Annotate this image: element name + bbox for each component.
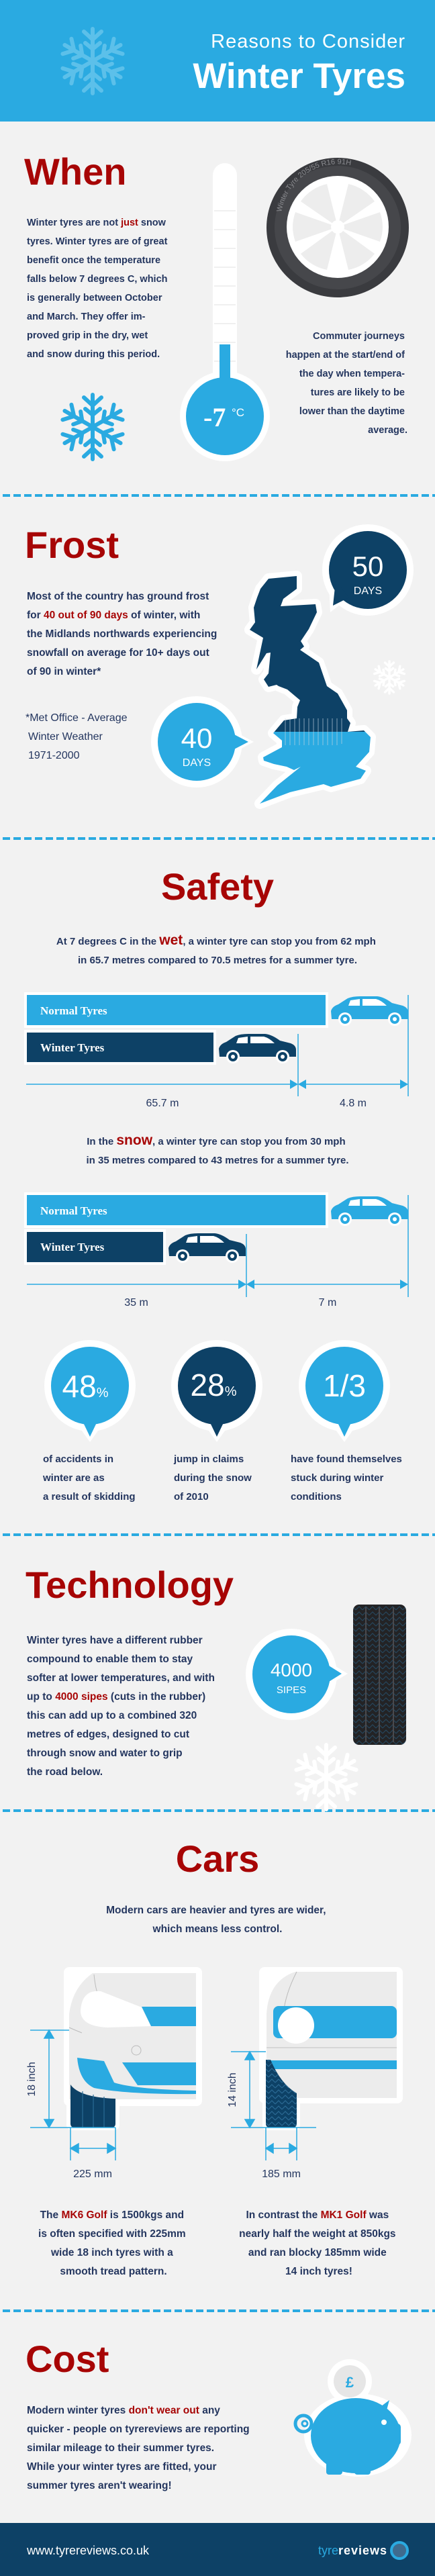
text block: commuter: average. <box>368 425 407 436</box>
icon: tyre tread <box>353 1605 406 1745</box>
text block: cost body: quicker - people on tyrereviews are reporting <box>27 2424 250 2435</box>
illustration: MK6 golf front <box>64 1967 202 2130</box>
text block: commuter: lower than the daytime <box>299 406 405 417</box>
icon: white snowflake <box>294 1745 358 1809</box>
dimension: 14 inch: 14 inch <box>227 2072 238 2107</box>
text block: commuter: the day when tempera- <box>299 369 405 379</box>
title: Winter Tyres <box>193 56 405 96</box>
text block: technology body: through snow and water to grip <box>27 1748 183 1759</box>
callout: 48% <box>44 1340 136 1442</box>
callout: 4000 sipes: SIPES <box>277 1684 306 1696</box>
text block: cost body: While your winter tyres are fitted, your <box>27 2461 217 2473</box>
panel: frost <box>25 524 414 804</box>
text block: wet intro: in 65.7 metres compared to 70.5 metres for a summer tyre. <box>78 955 357 966</box>
icon: faint header snowflake <box>60 29 125 93</box>
icon: snowflake <box>60 395 125 459</box>
bar chart: snow stopping: Normal Tyres <box>40 1204 107 1217</box>
text block: stat captions: stuck during winter <box>291 1472 384 1484</box>
text block: stat captions: conditions <box>291 1491 342 1502</box>
icon: faint snowflake <box>373 661 405 694</box>
dimension: 14 inch: 185 mm <box>262 2168 301 2180</box>
title <box>193 31 405 96</box>
text block: technology body: Winter tyres have a different rubber <box>27 1635 203 1646</box>
text block: stat captions: of accidents in <box>43 1453 113 1465</box>
panel: safety <box>24 865 408 1502</box>
text block: footnote: 1971-2000 <box>28 750 80 761</box>
dimension: 18 inch: 225 mm <box>73 2168 112 2180</box>
bar chart: wet stopping: 65.7 m <box>146 1098 179 1109</box>
text block: MK1: 14 inch tyres! <box>285 2266 352 2277</box>
callout: 50 days: 50 <box>352 551 383 582</box>
text block: frost body: for 40 out of 90 days of winter, with <box>27 610 200 621</box>
text block: stat captions: jump in claims <box>173 1453 244 1465</box>
heading: Cars: Cars <box>176 1838 259 1880</box>
dimension: 18 inch <box>26 2030 115 2180</box>
bar chart: snow stopping: Winter Tyres <box>40 1241 105 1253</box>
text block: cost body: Modern winter tyres don't wear out any <box>27 2405 220 2416</box>
text block: commuter: happen at the start/end of <box>286 350 405 361</box>
text block: when body: benefit once the temperature <box>27 255 160 266</box>
text block: cars intro: which means less control. <box>152 1923 282 1935</box>
callout: 40 days: 40 <box>181 722 212 754</box>
text block: technology body: this can add up to a combined 320 <box>27 1710 197 1721</box>
text block: technology body: the road below. <box>27 1766 103 1778</box>
header banner <box>0 0 435 122</box>
text block: when body: tyres. Winter tyres are of great <box>27 236 168 247</box>
callout: 4000 sipes: 4000 <box>271 1660 312 1680</box>
text block: frost body: snowfall on average for 10+ days out <box>27 647 209 659</box>
text block: stat captions: a result of skidding <box>43 1491 136 1502</box>
icon: piggy bank <box>295 2359 412 2477</box>
callout: 1/3: 1/3 <box>323 1368 366 1403</box>
text block: cost body: similar mileage to their summer tyres. <box>27 2442 214 2454</box>
text block: technology body: softer at lower temperatures, and with <box>27 1672 215 1684</box>
heading: Safety: Safety <box>161 865 274 908</box>
bar chart: wet stopping <box>24 992 408 1109</box>
bar chart: wet stopping: 4.8 m <box>340 1098 367 1109</box>
text block: footnote: *Met Office - Average <box>26 712 128 724</box>
text block: when body: proved grip in the dry, wet <box>27 330 148 341</box>
callout: 40 days <box>151 696 254 788</box>
text block: when body: falls below 7 degrees C, which <box>27 274 168 285</box>
heading: When: When <box>24 150 126 193</box>
text block: snow intro: in 35 metres compared to 43 metres for a summer tyre. <box>86 1155 349 1166</box>
heading: Frost: Frost <box>25 524 119 566</box>
panel: cars <box>26 1838 403 2277</box>
text block: MK6: smooth tread pattern. <box>60 2266 167 2277</box>
footer <box>0 2523 435 2576</box>
callout: 48%: 48% <box>62 1369 109 1404</box>
text block: stat captions: during the snow <box>174 1472 252 1484</box>
text block: when body: and snow during this period. <box>27 349 160 360</box>
text block: stat captions: winter are as <box>42 1472 105 1484</box>
bar chart: wet stopping: Normal Tyres <box>40 1004 107 1017</box>
text block: when body: is generally between October <box>27 293 162 303</box>
text block: frost body: the Midlands northwards experiencing <box>27 628 217 640</box>
heading: Technology: Technology <box>26 1564 234 1606</box>
text block: MK6: The MK6 Golf is 1500kgs and <box>40 2209 184 2221</box>
heading: Cost: Cost <box>26 2338 109 2380</box>
logo: tyrereviews: tyrereviews <box>318 2544 387 2557</box>
panel: technology <box>26 1564 406 1809</box>
footer: www.tyrereviews.co.uk <box>26 2544 150 2557</box>
text block: MK6: wide 18 inch tyres with a <box>50 2247 173 2258</box>
callout: 28% <box>171 1340 262 1442</box>
bar chart: snow stopping: 35 m <box>124 1297 148 1308</box>
text block: MK1: In contrast the MK1 Golf was <box>246 2209 389 2221</box>
logo: tyrereviews <box>318 2542 407 2559</box>
text block: frost body: Most of the country has ground frost <box>27 591 209 602</box>
text block: cars intro: Modern cars are heavier and tyres are wider, <box>106 1905 326 1916</box>
callout: 1/3 <box>299 1340 390 1442</box>
bar chart: snow stopping: 7 m <box>319 1297 336 1308</box>
icon: thermometer: -7 <box>203 402 226 432</box>
text block: commuter: Commuter journeys <box>313 331 405 342</box>
text block: footnote: Winter Weather <box>28 731 103 743</box>
icon: tyre: Winter Tyre 205/55 R16 91H <box>277 158 351 211</box>
icon: thermometer <box>180 163 270 461</box>
callout: 50 days: DAYS <box>354 585 382 597</box>
text block: frost body: of 90 in winter* <box>27 666 101 677</box>
callout: 28%: 28% <box>191 1368 237 1402</box>
callout: 40 days: DAYS <box>183 757 211 769</box>
dimension: 18 inch: 18 inch <box>26 2062 38 2097</box>
icon: piggy bank: £ <box>346 2374 354 2391</box>
dimension: 14 inch <box>227 2052 316 2180</box>
panel: cost <box>26 2338 412 2491</box>
bar chart: snow stopping <box>24 1192 408 1308</box>
text block: when body: and March. They offer im- <box>27 312 146 322</box>
text block: commuter: tures are likely to be <box>311 387 405 398</box>
text block: MK6: is often specified with 225mm <box>38 2228 186 2240</box>
callout: 50 days <box>322 524 414 616</box>
text block: when body: Winter tyres are not just snow <box>27 218 166 228</box>
bar chart: wet stopping: Winter Tyres <box>40 1041 105 1054</box>
callout: 4000 sipes <box>246 1629 348 1720</box>
text block: snow intro: In the snow, a winter tyre can stop you from 30 mph <box>87 1133 346 1148</box>
title: Reasons to Consider <box>211 31 405 52</box>
text block: technology body: up to 4000 sipes (cuts in the rubber) <box>27 1691 205 1703</box>
text block: MK1: and ran blocky 185mm wide <box>248 2247 387 2258</box>
text block: MK1: nearly half the weight at 850kgs <box>239 2228 396 2240</box>
text block: stat captions: have found themselves <box>291 1453 402 1465</box>
illustration: MK1 golf front <box>259 1967 403 2130</box>
icon: thermometer: °C <box>232 406 244 419</box>
map: UK <box>250 576 371 804</box>
icon: tyre <box>267 158 409 297</box>
text block: technology body: compound to enable them to stay <box>27 1654 193 1665</box>
text block: wet intro: At 7 degrees C in the wet, a winter tyre can stop you from 62 mph <box>56 933 376 948</box>
panel: when <box>24 150 409 461</box>
text block: technology body: metres of edges, designed to cut <box>27 1729 189 1740</box>
text block: stat captions: of 2010 <box>174 1491 209 1502</box>
text block: cost body: summer tyres aren't wearing! <box>27 2480 172 2491</box>
